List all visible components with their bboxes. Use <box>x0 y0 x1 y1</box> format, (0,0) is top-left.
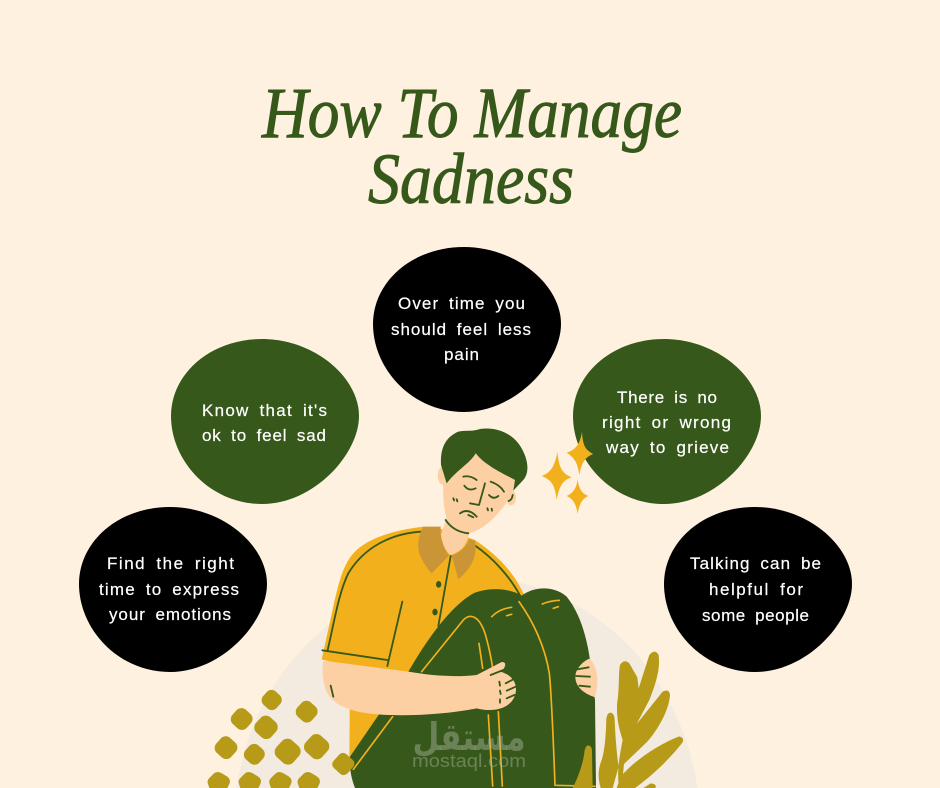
bubble: over time: Over time you <box>398 294 525 313</box>
watermark: مستقل <box>412 715 526 759</box>
shirt <box>322 527 527 763</box>
background circle <box>237 576 697 788</box>
hair <box>441 429 527 491</box>
neck and face <box>441 453 517 555</box>
far hand <box>575 659 597 697</box>
watermark <box>412 715 526 771</box>
bubble: over time <box>373 247 561 412</box>
trouser seams <box>353 600 595 786</box>
bubble: over time: should feel less <box>391 320 531 339</box>
bubble: no right or wrong: There is no <box>617 388 717 407</box>
bubble: find the right time: Find the right <box>107 554 234 573</box>
bubble: find the right time <box>79 507 267 672</box>
collar <box>418 527 476 579</box>
near arm and hand <box>323 661 516 715</box>
left ear <box>438 467 448 485</box>
decorative dots <box>208 687 357 788</box>
far hand finger lines <box>576 667 590 687</box>
bubble: find the right time: your emotions <box>109 605 231 624</box>
knuckle lines <box>331 670 516 703</box>
bubble: talking can help: Talking can be <box>690 554 821 573</box>
bubble: talking can help: helpful for <box>709 580 803 599</box>
facial features <box>446 476 513 533</box>
bubble: ok to feel sad: ok to feel sad <box>202 426 326 445</box>
title: Sadness <box>368 139 574 219</box>
bubble: talking can help: some people <box>702 606 809 625</box>
watermark: mostaql.com <box>412 751 526 771</box>
title <box>261 73 682 219</box>
shirt seams and buttons <box>322 532 521 666</box>
bubble: ok to feel sad <box>171 339 359 504</box>
right ear <box>506 490 516 505</box>
bubble: no right or wrong: right or wrong <box>602 413 731 432</box>
bubble: find the right time: time to express <box>99 580 239 599</box>
bubble: talking can help <box>664 507 852 672</box>
sparkles <box>542 432 593 514</box>
legs <box>350 588 596 788</box>
sad man figure <box>322 429 597 788</box>
bubble: over time: pain <box>444 345 479 364</box>
bubble: no right or wrong: way to grieve <box>605 438 729 457</box>
title: How To Manage <box>261 73 682 153</box>
bubble: no right or wrong <box>573 339 761 504</box>
plant leaves <box>573 652 683 788</box>
bubble: ok to feel sad: Know that it's <box>202 401 327 420</box>
